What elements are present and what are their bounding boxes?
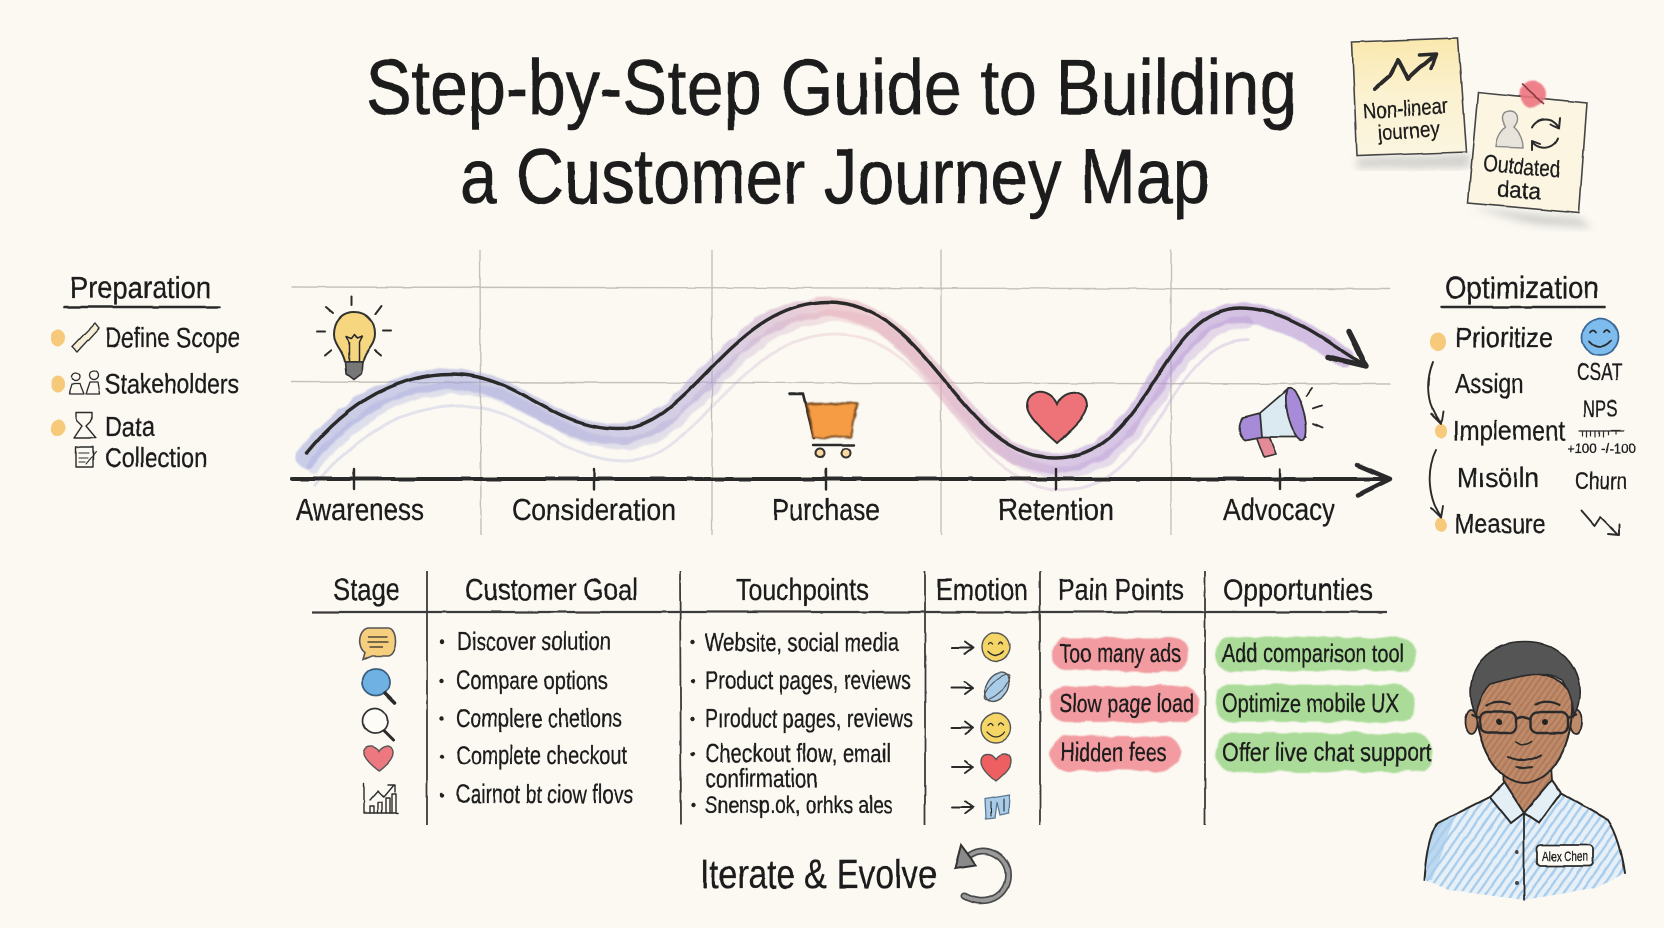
persona: Alex Chen [1424,642,1625,900]
sticky note: non-linear journey: Non-linear [1362,93,1449,124]
metrics: +100 -/-100 [1567,440,1636,456]
table header: Touchpoints [736,572,869,607]
column: touchpoints: Website, social media [705,627,899,657]
name tag [1537,845,1593,866]
icon: light bulb [317,296,391,380]
title [366,43,1297,220]
grid lines [291,250,1390,535]
panel: preparation [51,270,240,473]
pain point: too many ads: Too many ads [1060,638,1181,668]
sticky note: outdated data [1468,81,1592,228]
icon: small heart [364,746,393,771]
ears [1465,710,1477,734]
column: touchpoints: Pıroduct pages, reviews [705,703,913,733]
item: data collection [51,411,207,473]
item: define scope: Define Scope [105,322,240,353]
icon: churn down arrow [1581,511,1619,535]
metrics [1567,359,1636,495]
opportunity: live chat: Offer live chat support [1222,737,1433,767]
icon: happy smiley [981,713,1011,743]
arrowhead [1328,332,1366,366]
metrics: Churn [1575,468,1627,495]
optimization steps: Measure [1455,508,1546,539]
opportunity: mobile UX: Optimize mobile UX [1222,688,1399,718]
opportunity: comparison tool: Add comparison tool [1222,638,1404,668]
icon: megaphone [1239,386,1322,457]
icon: blue magnifier [362,668,395,703]
icon: smiley [982,633,1010,661]
column: touchpoints: Checkout flow, email [705,738,891,768]
optimization steps: Prioritize [1455,322,1553,353]
optimization steps: Assign [1455,368,1524,399]
collar [1490,780,1561,823]
column: touchpoints: Snensp.ok, orhks ales [705,792,893,819]
optimization steps: Mısöıln [1457,462,1539,493]
table header: Opportunties [1223,572,1373,607]
optimization steps [1428,322,1565,539]
stage labels: Advocacy [1223,492,1335,527]
table header: Stage [333,572,400,607]
table header [333,572,1373,607]
column: customer goal: Cairnot bt ciow flovs [456,779,633,809]
column: touchpoints: Product pages, reviews [705,665,911,695]
icon: blue swirl [979,668,1015,706]
pain point: hidden fees: Hidden fees [1060,737,1167,767]
heading: optimization: Optimization [1445,270,1599,305]
title: Step-by-Step Guide to Building [366,43,1297,131]
neck [1503,765,1553,815]
column: emotion [952,633,1015,819]
icon: red heart [981,754,1011,781]
column: customer goal [440,626,633,809]
facial features [1487,702,1559,768]
stage labels [296,492,1335,527]
journey ribbon [306,307,1344,490]
icon: heart [1027,392,1087,443]
opportunity: live chat [1216,733,1433,772]
face [1476,673,1572,783]
journey table [312,571,1433,825]
panel: optimization [1428,270,1636,539]
item: stakeholders [51,368,239,399]
metrics: CSAT [1577,359,1622,386]
icon: speech bubble [360,628,396,660]
pain point: slow page load: Slow page load [1059,688,1194,718]
icon: shopping cart [790,394,857,458]
sticky note: outdated data: data [1496,175,1542,204]
item: stakeholders: Stakeholders [105,368,239,399]
icon: outline magnifier [362,708,393,740]
pain point: slow page load [1050,686,1199,722]
journey chart [291,250,1390,535]
stage labels: Retention [998,492,1114,527]
column: touchpoints [691,627,913,819]
shirt [1424,793,1625,900]
column: customer goal: Complere chetlons [456,703,622,733]
name tag: Alex Chen [1542,848,1588,864]
stage labels: Consideration [512,492,676,527]
column: customer goal: Compare options [456,665,608,695]
journey curve [307,302,1365,458]
icon: growth chart [364,783,398,813]
icon: loop arrow [955,845,1008,901]
timeline axis [292,465,1390,495]
hair [1471,642,1580,716]
glasses [1472,712,1576,733]
heading: preparation: Preparation [70,270,211,305]
table header: Emotion [936,572,1028,607]
table rules [312,571,1387,825]
opportunity: mobile UX [1215,685,1414,722]
title: a Customer Journey Map [460,132,1210,220]
table header: Pain Points [1058,572,1184,607]
column: customer goal: Complete checkout [456,740,628,770]
table header: Customer Goal [465,572,638,607]
sticky note: non-linear journey [1352,38,1470,168]
item: data collection: Data [105,411,155,442]
column: pain points [1050,638,1199,771]
icon: CSAT smiley [1582,318,1618,356]
red pin [1520,81,1546,107]
iterate and evolve: Iterate & Evolve [700,851,937,897]
sticky note: non-linear journey: journey [1376,116,1441,145]
column: stage icons [360,628,398,813]
item: data collection: Collection [105,442,207,473]
column: customer goal: Discover solution [457,626,611,656]
icon: faded person [1496,111,1523,148]
stage labels: Awareness [296,492,424,527]
column: touchpoints: confirmation [705,763,818,793]
metrics: NPS [1583,396,1617,423]
icon: blue book [985,795,1010,819]
icon: refresh cycle [1532,118,1560,150]
sticky note: outdated data: Outdated [1482,150,1561,182]
column: opportunities [1215,637,1433,772]
stage labels: Purchase [772,492,880,527]
item: define scope [51,322,240,353]
optimization steps: Implement [1453,415,1565,446]
